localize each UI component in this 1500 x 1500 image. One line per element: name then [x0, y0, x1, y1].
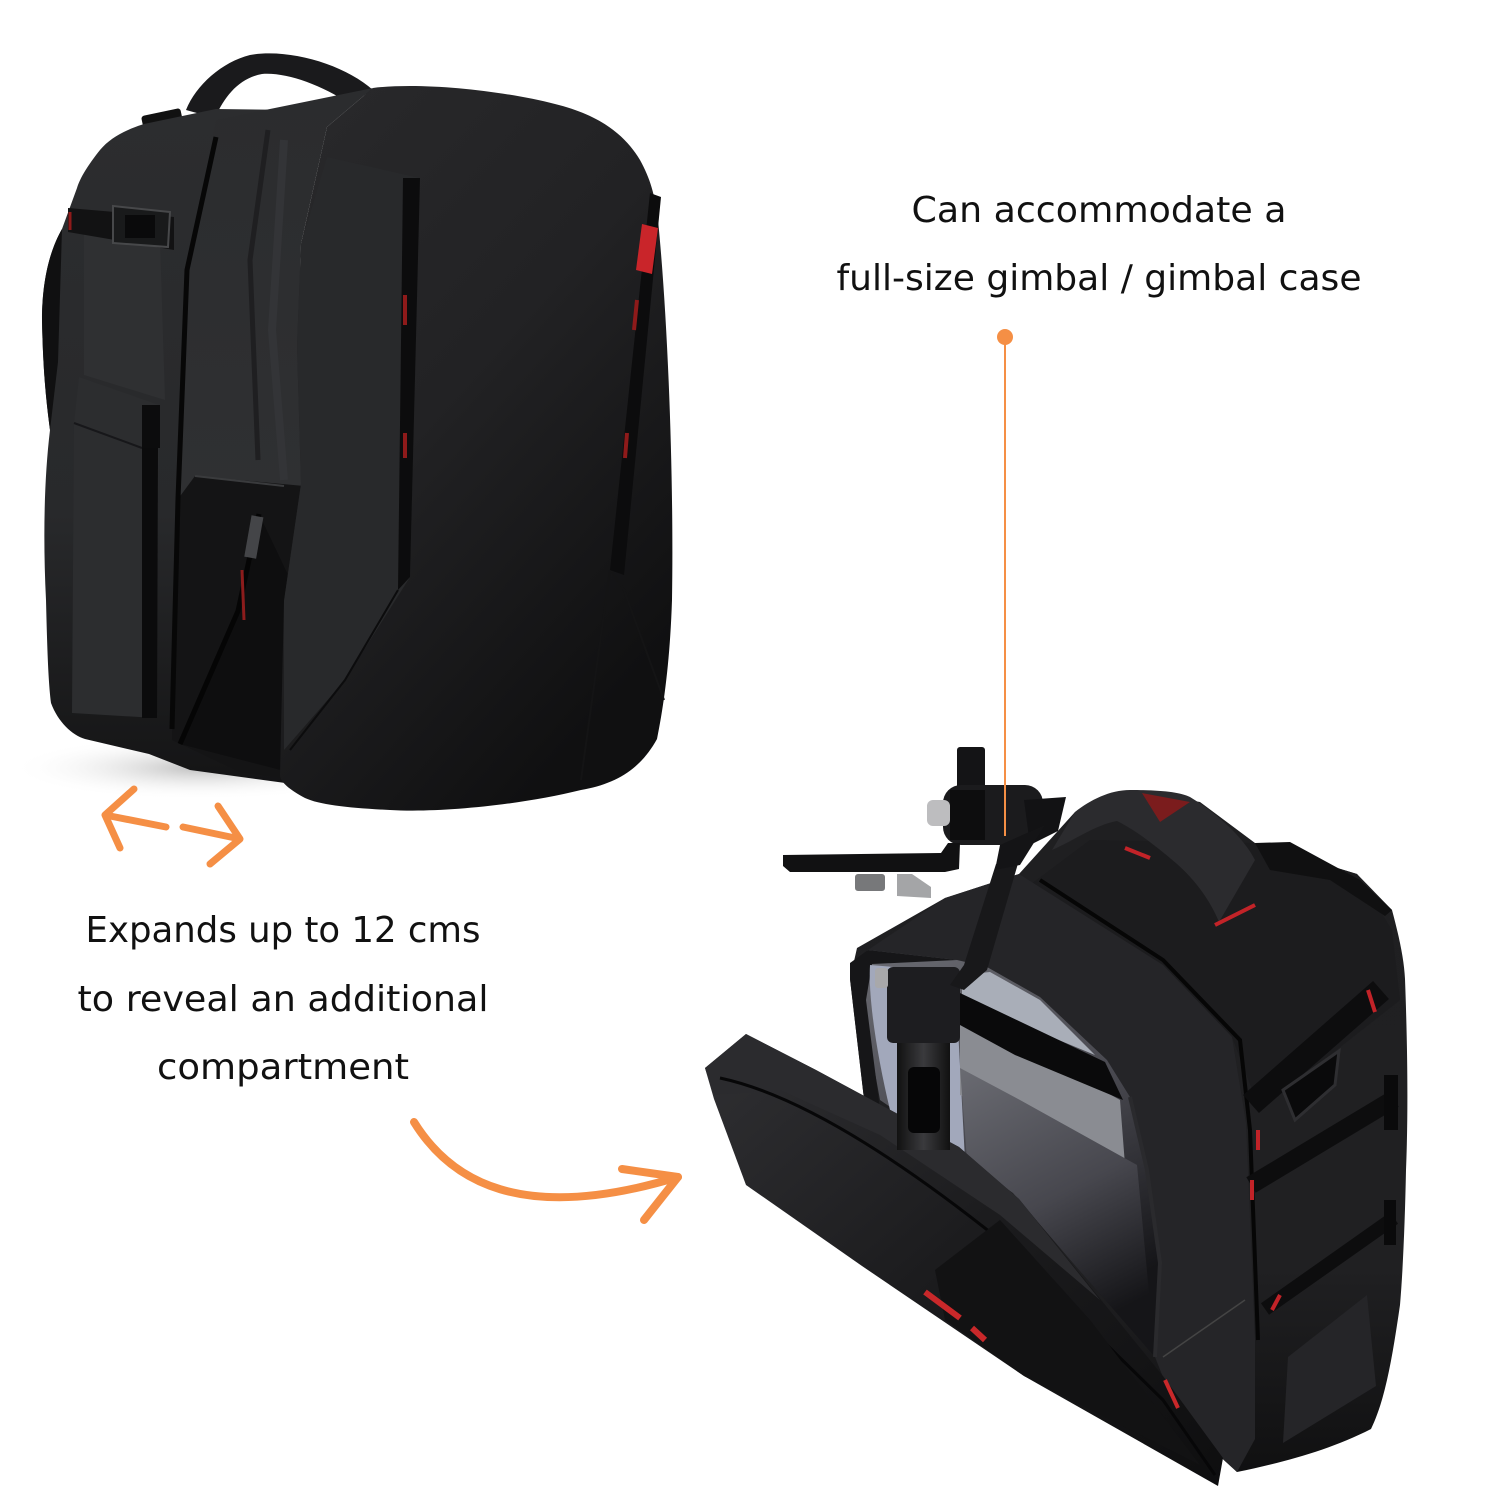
- panel: expanded backpack photo: [10, 53, 672, 811]
- text: gimbal caption: full-size gimbal / gimbal case: [836, 258, 1362, 299]
- gimbal top motor: [957, 747, 985, 792]
- gimbal tray arm: [783, 843, 960, 872]
- expansion mesh pocket: [172, 476, 304, 780]
- front panel straps: [398, 178, 420, 590]
- flap rim: [705, 1034, 1100, 1300]
- text: gimbal caption: [836, 190, 1362, 299]
- side upper light panel: [84, 230, 165, 400]
- interior black strap: [960, 993, 1123, 1100]
- text: expansion caption: to reveal an additional: [78, 979, 489, 1020]
- red accents on bag: [1125, 848, 1375, 1310]
- side pocket strap: [142, 405, 160, 448]
- bag front zip panel: [868, 874, 1255, 1472]
- text: expansion caption: [78, 910, 489, 1088]
- main zipper: [172, 137, 216, 729]
- gimbal handle: [897, 1040, 950, 1150]
- lower side pocket: [1283, 1295, 1376, 1443]
- icon: curved arrow to open bag: [414, 1122, 678, 1220]
- panel: open backpack photo with gimbal: [705, 747, 1407, 1486]
- bag body silhouette: [850, 790, 1407, 1472]
- gimbal arm: [950, 860, 1019, 990]
- interior rim: [850, 950, 957, 1110]
- interior upper light panel: [962, 972, 1095, 1055]
- backpack top handle: [186, 53, 373, 118]
- expansion gusset: [178, 88, 373, 499]
- text: expansion caption: compartment: [157, 1047, 409, 1088]
- bag interior: [855, 950, 1160, 1357]
- backpack front panel: [280, 86, 672, 811]
- text: expansion caption: Expands up to 12 cms: [86, 910, 480, 951]
- side pocket: [72, 377, 159, 718]
- side buckle strap: [68, 208, 174, 250]
- text: gimbal caption: Can accommodate a: [912, 190, 1286, 231]
- top handle: [1052, 790, 1255, 922]
- side straps and buckles: [1251, 990, 1381, 1104]
- backpack left side panel: [42, 109, 300, 785]
- top panel: [1019, 840, 1400, 1110]
- interior lower pocket: [960, 1068, 1155, 1357]
- icon: expansion arrows: [105, 789, 240, 864]
- mesh zipper with red pull: [180, 514, 259, 744]
- red flap accents: [925, 1292, 985, 1340]
- flap quilted section: [935, 1220, 1200, 1465]
- open front flap: [705, 1034, 1223, 1486]
- zip tab at top right: [1255, 842, 1392, 916]
- handle logo: [1142, 793, 1190, 822]
- buckle on top: [141, 108, 183, 130]
- front lighter side panel: [284, 157, 420, 750]
- red stitching accents: [405, 295, 637, 458]
- red brand label: [636, 224, 658, 274]
- callout line: gimbal pointer: [997, 329, 1013, 836]
